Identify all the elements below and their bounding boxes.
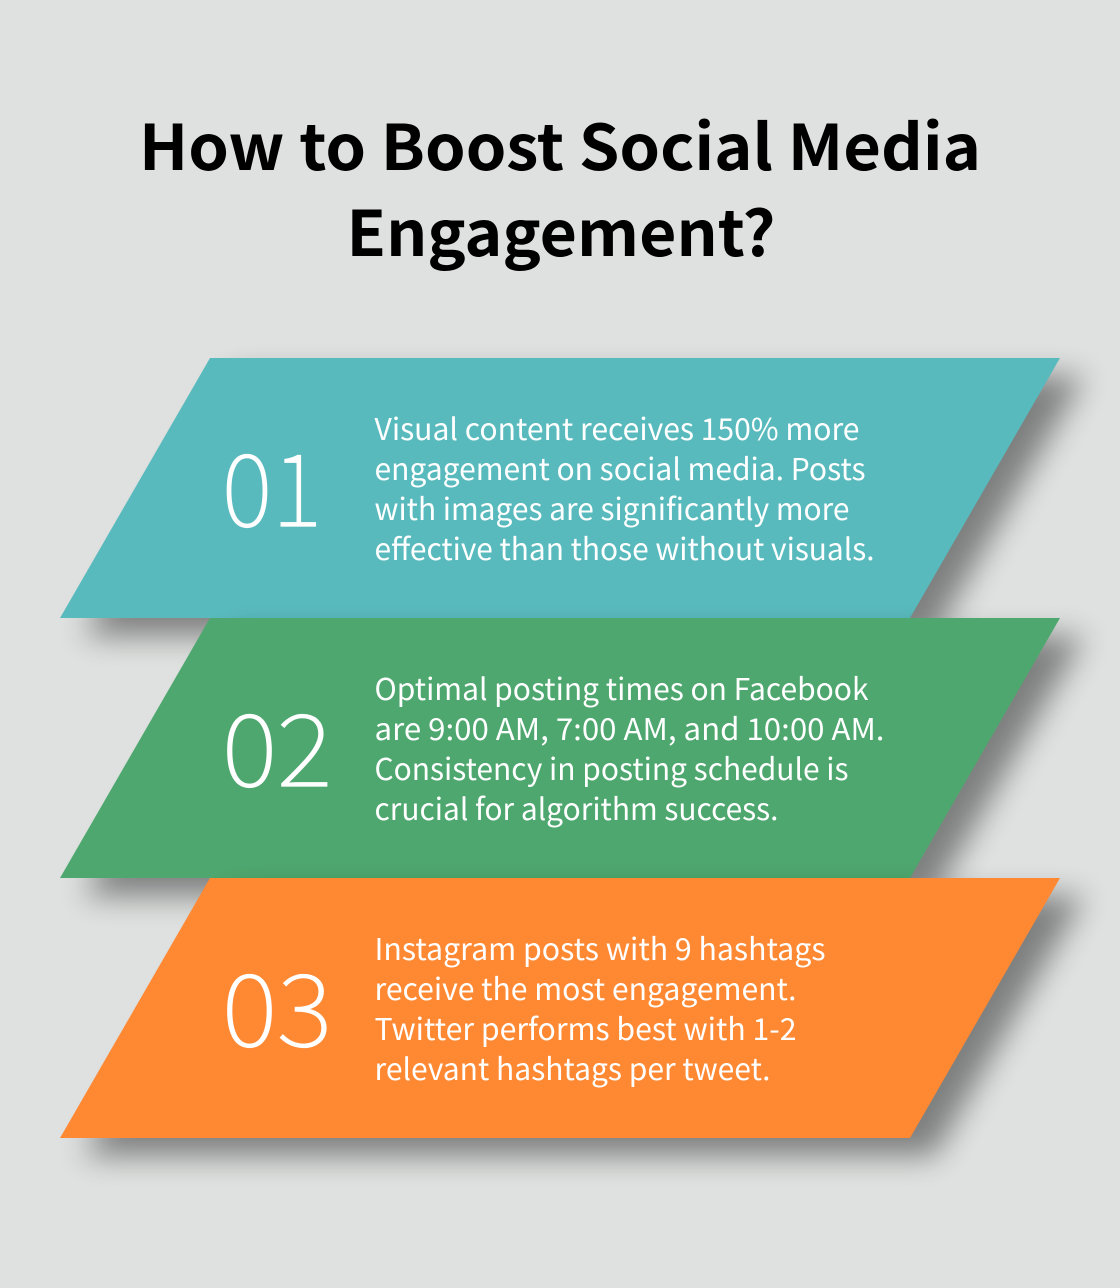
step number 01: 01 bbox=[222, 410, 322, 555]
step 03 text: relevant hashtags per tweet. bbox=[374, 1045, 770, 1089]
step 02 text: are 9:00 AM, 7:00 AM, and 10:00 AM. bbox=[374, 705, 884, 749]
title bbox=[139, 98, 981, 275]
step 02 text: Optimal posting times on Facebook bbox=[374, 665, 869, 709]
step 01 text: effective than those without visuals. bbox=[374, 525, 874, 569]
title: Engagement? bbox=[346, 184, 776, 275]
step number 03: 03 bbox=[222, 930, 332, 1075]
panel: step 03 bbox=[60, 878, 1060, 1138]
panel 1 shadow bbox=[84, 376, 1084, 636]
step 03 text bbox=[374, 925, 826, 1089]
step 01 text: engagement on social media. Posts bbox=[374, 445, 866, 489]
step 02 text: Consistency in posting schedule is bbox=[374, 745, 848, 789]
title: How to Boost Social Media bbox=[139, 98, 981, 189]
step 01 text: with images are significantly more bbox=[374, 485, 850, 529]
step 01 text: Visual content receives 150% more bbox=[374, 405, 860, 449]
step 01 text bbox=[374, 405, 874, 569]
step 03 text: Instagram posts with 9 hashtags bbox=[374, 925, 826, 969]
step 03 text: Twitter performs best with 1-2 bbox=[374, 1005, 796, 1049]
step 02 text bbox=[374, 665, 884, 829]
step number 02: 02 bbox=[222, 670, 332, 815]
panel: step 01 bbox=[60, 358, 1060, 618]
panel: step 02 bbox=[60, 618, 1060, 878]
step 02 text: crucial for algorithm success. bbox=[374, 785, 778, 829]
panel 3 shadow bbox=[84, 896, 1084, 1156]
panel 2 shadow bbox=[84, 636, 1084, 896]
step 03 text: receive the most engagement. bbox=[374, 965, 796, 1009]
